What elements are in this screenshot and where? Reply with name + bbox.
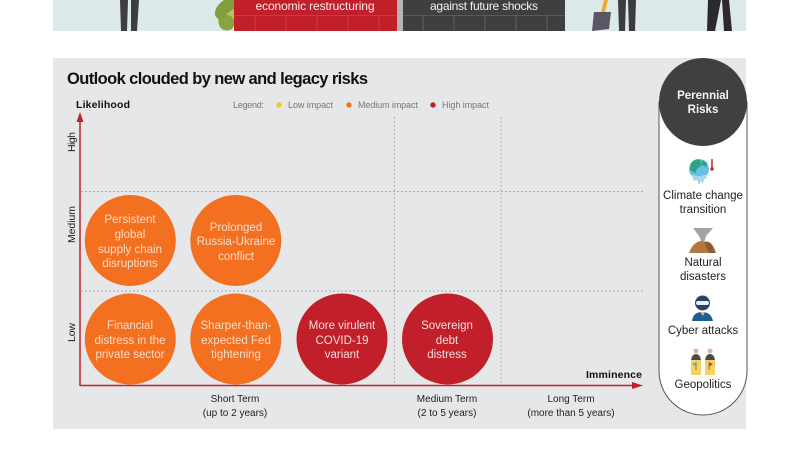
label: Natural disasters bbox=[680, 257, 726, 283]
icon: podiums bbox=[691, 348, 715, 375]
label: Natural disasters: disasters bbox=[680, 271, 726, 283]
x axis tick labels: Long Term bbox=[547, 394, 595, 405]
label: Natural disasters: Natural bbox=[684, 257, 722, 269]
title: Outlook clouded by new and legacy risks bbox=[67, 70, 368, 88]
icon: hacker bbox=[692, 296, 713, 321]
x axis tick labels: Medium Term bbox=[417, 394, 477, 405]
bubble: Persistent global supply chain disruptions: Persistent bbox=[104, 214, 156, 226]
y axis arrow bbox=[76, 112, 84, 386]
grid lines bbox=[81, 117, 643, 385]
x axis tick labels: (more than 5 years) bbox=[527, 408, 615, 419]
icon: leaves bbox=[215, 0, 242, 30]
label: Climate change transition bbox=[663, 190, 743, 216]
x axis tick labels: (2 to 5 years) bbox=[418, 408, 476, 419]
x axis arrow bbox=[80, 382, 643, 389]
bubble: Persistent global supply chain disruptions: disruptions bbox=[102, 258, 158, 270]
legend: High impact bbox=[442, 100, 489, 110]
bubble: More virulent COVID-19 variant bbox=[296, 294, 388, 384]
bubble: Persistent global supply chain disruptions bbox=[85, 195, 176, 286]
dark block: against future shocks bbox=[403, 0, 565, 31]
y axis ticks: Medium bbox=[66, 206, 78, 243]
x axis tick labels bbox=[203, 394, 615, 419]
legend: Low impact bbox=[288, 100, 333, 110]
y axis label: Likelihood: Likelihood bbox=[76, 99, 130, 111]
y axis ticks: Low bbox=[66, 323, 78, 342]
bubble: Sovereign debt distress: debt bbox=[436, 335, 459, 347]
bubble: Prolonged Russia-Ukraine conflict bbox=[190, 195, 281, 286]
panel: perennial risks bbox=[659, 58, 747, 415]
red block: economic restructuring bbox=[234, 0, 397, 31]
panel: outlook chart bbox=[53, 58, 746, 429]
bubble: Financial distress in the private sector: Financial bbox=[107, 320, 153, 332]
icon: tornado and hill bbox=[689, 228, 717, 253]
bubble: Sharper-than-expected Fed tightening bbox=[190, 294, 281, 384]
x axis label: Imminence: Imminence bbox=[586, 369, 642, 381]
bubble: More virulent COVID-19 variant: COVID-19 bbox=[315, 335, 369, 347]
y axis ticks: High bbox=[66, 132, 78, 152]
bubble: Sovereign debt distress: Sovereign bbox=[421, 320, 473, 332]
figure: left person legs bbox=[120, 0, 139, 31]
figure: shovel bbox=[592, 0, 611, 31]
bubble: Prolonged Russia-Ukraine conflict: Russia-Ukraine bbox=[197, 236, 275, 248]
x axis tick labels: Short Term bbox=[211, 394, 259, 405]
x axis tick labels: (up to 2 years) bbox=[203, 408, 267, 419]
bubble: Sharper-than-expected Fed tightening: Sharper-than- bbox=[201, 320, 272, 332]
bubble: Sharper-than-expected Fed tightening: tightening bbox=[211, 349, 261, 361]
bubble: More virulent COVID-19 variant: variant bbox=[325, 349, 360, 361]
icon: melting globe bbox=[689, 159, 714, 185]
heading: Perennial Risks bbox=[659, 58, 747, 146]
legend: Medium impact bbox=[358, 100, 418, 110]
bubble: Financial distress in the private sector bbox=[85, 294, 176, 384]
bubble: Sharper-than-expected Fed tightening: expected Fed bbox=[201, 335, 271, 347]
heading: Perennial Risks: Risks bbox=[688, 104, 718, 116]
bubble: Prolonged Russia-Ukraine conflict: Prolonged bbox=[210, 222, 262, 234]
bubble: Prolonged Russia-Ukraine conflict: conflict bbox=[218, 251, 255, 263]
bubble: Sovereign debt distress bbox=[402, 294, 493, 384]
bubble: Persistent global supply chain disruptions: global bbox=[115, 229, 145, 241]
figure: middle person legs bbox=[618, 0, 636, 31]
bubble: Persistent global supply chain disruptions: supply chain bbox=[98, 244, 162, 256]
legend bbox=[233, 100, 489, 110]
label: Climate change transition: Climate change bbox=[663, 190, 743, 202]
y axis ticks bbox=[66, 132, 78, 342]
label: Geopolitics: Geopolitics bbox=[675, 379, 732, 391]
top banner strip bbox=[53, 0, 746, 31]
bubble: More virulent COVID-19 variant: More virulent bbox=[309, 320, 376, 332]
bubble: Sovereign debt distress: distress bbox=[427, 349, 467, 361]
figure: right person legs bbox=[707, 0, 732, 31]
legend: Legend: bbox=[233, 100, 264, 110]
bubble: Financial distress in the private sector: private sector bbox=[95, 349, 165, 361]
heading: Perennial Risks: Perennial bbox=[677, 90, 729, 102]
label: Climate change transition: transition bbox=[680, 204, 726, 216]
label: Cyber attacks: Cyber attacks bbox=[668, 325, 738, 337]
bubble: Financial distress in the private sector: distress in the bbox=[95, 335, 165, 347]
